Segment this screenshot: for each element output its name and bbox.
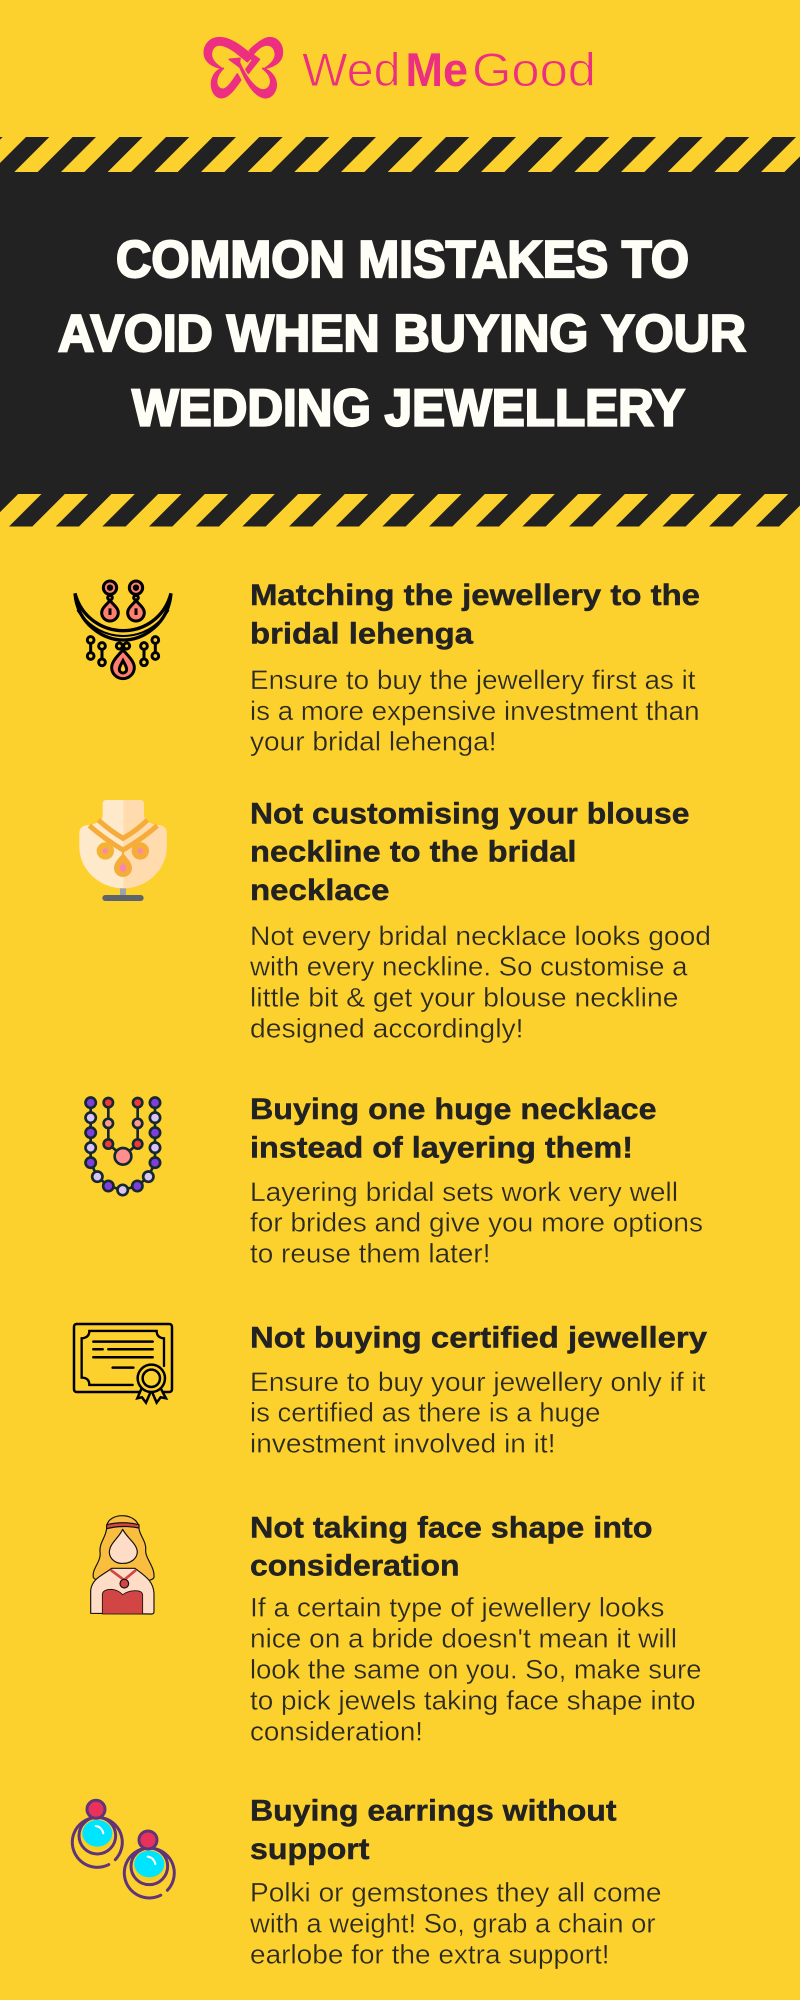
body text: earlobe for the extra support! — [250, 1939, 610, 1969]
body text: Polki or gemstones they all come — [250, 1878, 662, 1908]
body text: to reuse them later! — [250, 1239, 490, 1269]
heading: neckline to the bridal — [250, 836, 576, 869]
hazard stripe band: bottom — [0, 494, 800, 526]
hazard stripe band: top — [0, 137, 800, 172]
body text: Layering bridal sets work very well — [250, 1177, 678, 1207]
heading — [250, 1093, 656, 1164]
body text: consideration! — [250, 1716, 423, 1746]
item 2: blouse neckline — [79, 797, 711, 1044]
heading: Not buying certified jewellery — [250, 1322, 707, 1355]
icon: butterfly hearts logo mark — [204, 38, 282, 98]
body text — [249, 1878, 661, 1969]
body text: Ensure to buy your jewellery only if it — [250, 1367, 706, 1397]
item 4: certified jewellery — [74, 1322, 707, 1459]
body text: designed accordingly! — [250, 1014, 524, 1044]
body text: for brides and give you more options — [250, 1208, 703, 1238]
heading — [250, 1511, 652, 1583]
body text — [250, 1593, 702, 1746]
body text: investment involved in it! — [250, 1429, 556, 1459]
body text: with a weight! So, grab a chain or — [249, 1909, 655, 1939]
title — [58, 231, 746, 438]
body text: If a certain type of jewellery looks — [250, 1593, 664, 1623]
heading: necklace — [250, 874, 390, 907]
title banner — [0, 172, 800, 494]
heading: Not customising your blouse — [250, 797, 690, 830]
heading: Matching the jewellery to the — [250, 579, 700, 612]
icon: pair of gemstone earrings — [72, 1800, 174, 1898]
body text — [249, 921, 711, 1044]
title: AVOID WHEN BUYING YOUR — [58, 305, 746, 363]
item 3: layering necklaces — [85, 1093, 703, 1269]
title: COMMON MISTAKES TO — [116, 231, 689, 289]
body text — [250, 1177, 703, 1269]
body text: is a more expensive investment than — [250, 696, 700, 726]
body text: to pick jewels taking face shape into — [250, 1685, 696, 1715]
icon: certificate with seal — [74, 1324, 172, 1403]
heading: Buying one huge necklace — [250, 1093, 656, 1126]
item 6: earrings support — [72, 1795, 661, 1969]
body text: little bit & get your blouse neckline — [250, 983, 678, 1013]
icon: beaded layered necklace — [85, 1097, 160, 1195]
body text: look the same on you. So, make sure — [250, 1654, 702, 1684]
wordmark — [302, 43, 596, 96]
body text: Not every bridal necklace looks good — [250, 921, 711, 951]
body text — [250, 1367, 706, 1459]
heading: Not taking face shape into — [250, 1511, 652, 1544]
heading — [250, 1795, 616, 1866]
wordmark: Me — [406, 43, 468, 96]
wordmark: Wed — [302, 43, 400, 96]
heading: instead of layering them! — [250, 1131, 633, 1164]
icon: necklace and earrings set — [75, 581, 171, 679]
title: WEDDING JEWELLERY — [132, 380, 685, 438]
body text — [250, 665, 700, 757]
heading: support — [250, 1833, 370, 1866]
icon: necklace on display bust — [79, 800, 167, 901]
icon: bride portrait — [91, 1516, 154, 1614]
body text: with every neckline. So customise a — [249, 952, 688, 982]
heading: bridal lehenga — [250, 617, 473, 650]
heading: Buying earrings without — [250, 1795, 616, 1828]
body text: nice on a bride doesn't mean it will — [250, 1624, 677, 1654]
icon: right earring — [124, 1831, 174, 1898]
body text: Ensure to buy the jewellery first as it — [250, 665, 696, 695]
wordmark: Good — [472, 43, 596, 96]
item 1: matching the jewellery — [75, 579, 700, 757]
icon: left earring — [72, 1800, 122, 1867]
body text: your bridal lehenga! — [250, 727, 496, 757]
item 5: face shape — [91, 1511, 701, 1746]
heading: consideration — [250, 1550, 460, 1583]
heading — [250, 579, 700, 650]
logo: WedMeGood — [204, 38, 596, 98]
heading — [250, 797, 690, 907]
body text: is certified as there is a huge — [250, 1398, 600, 1428]
